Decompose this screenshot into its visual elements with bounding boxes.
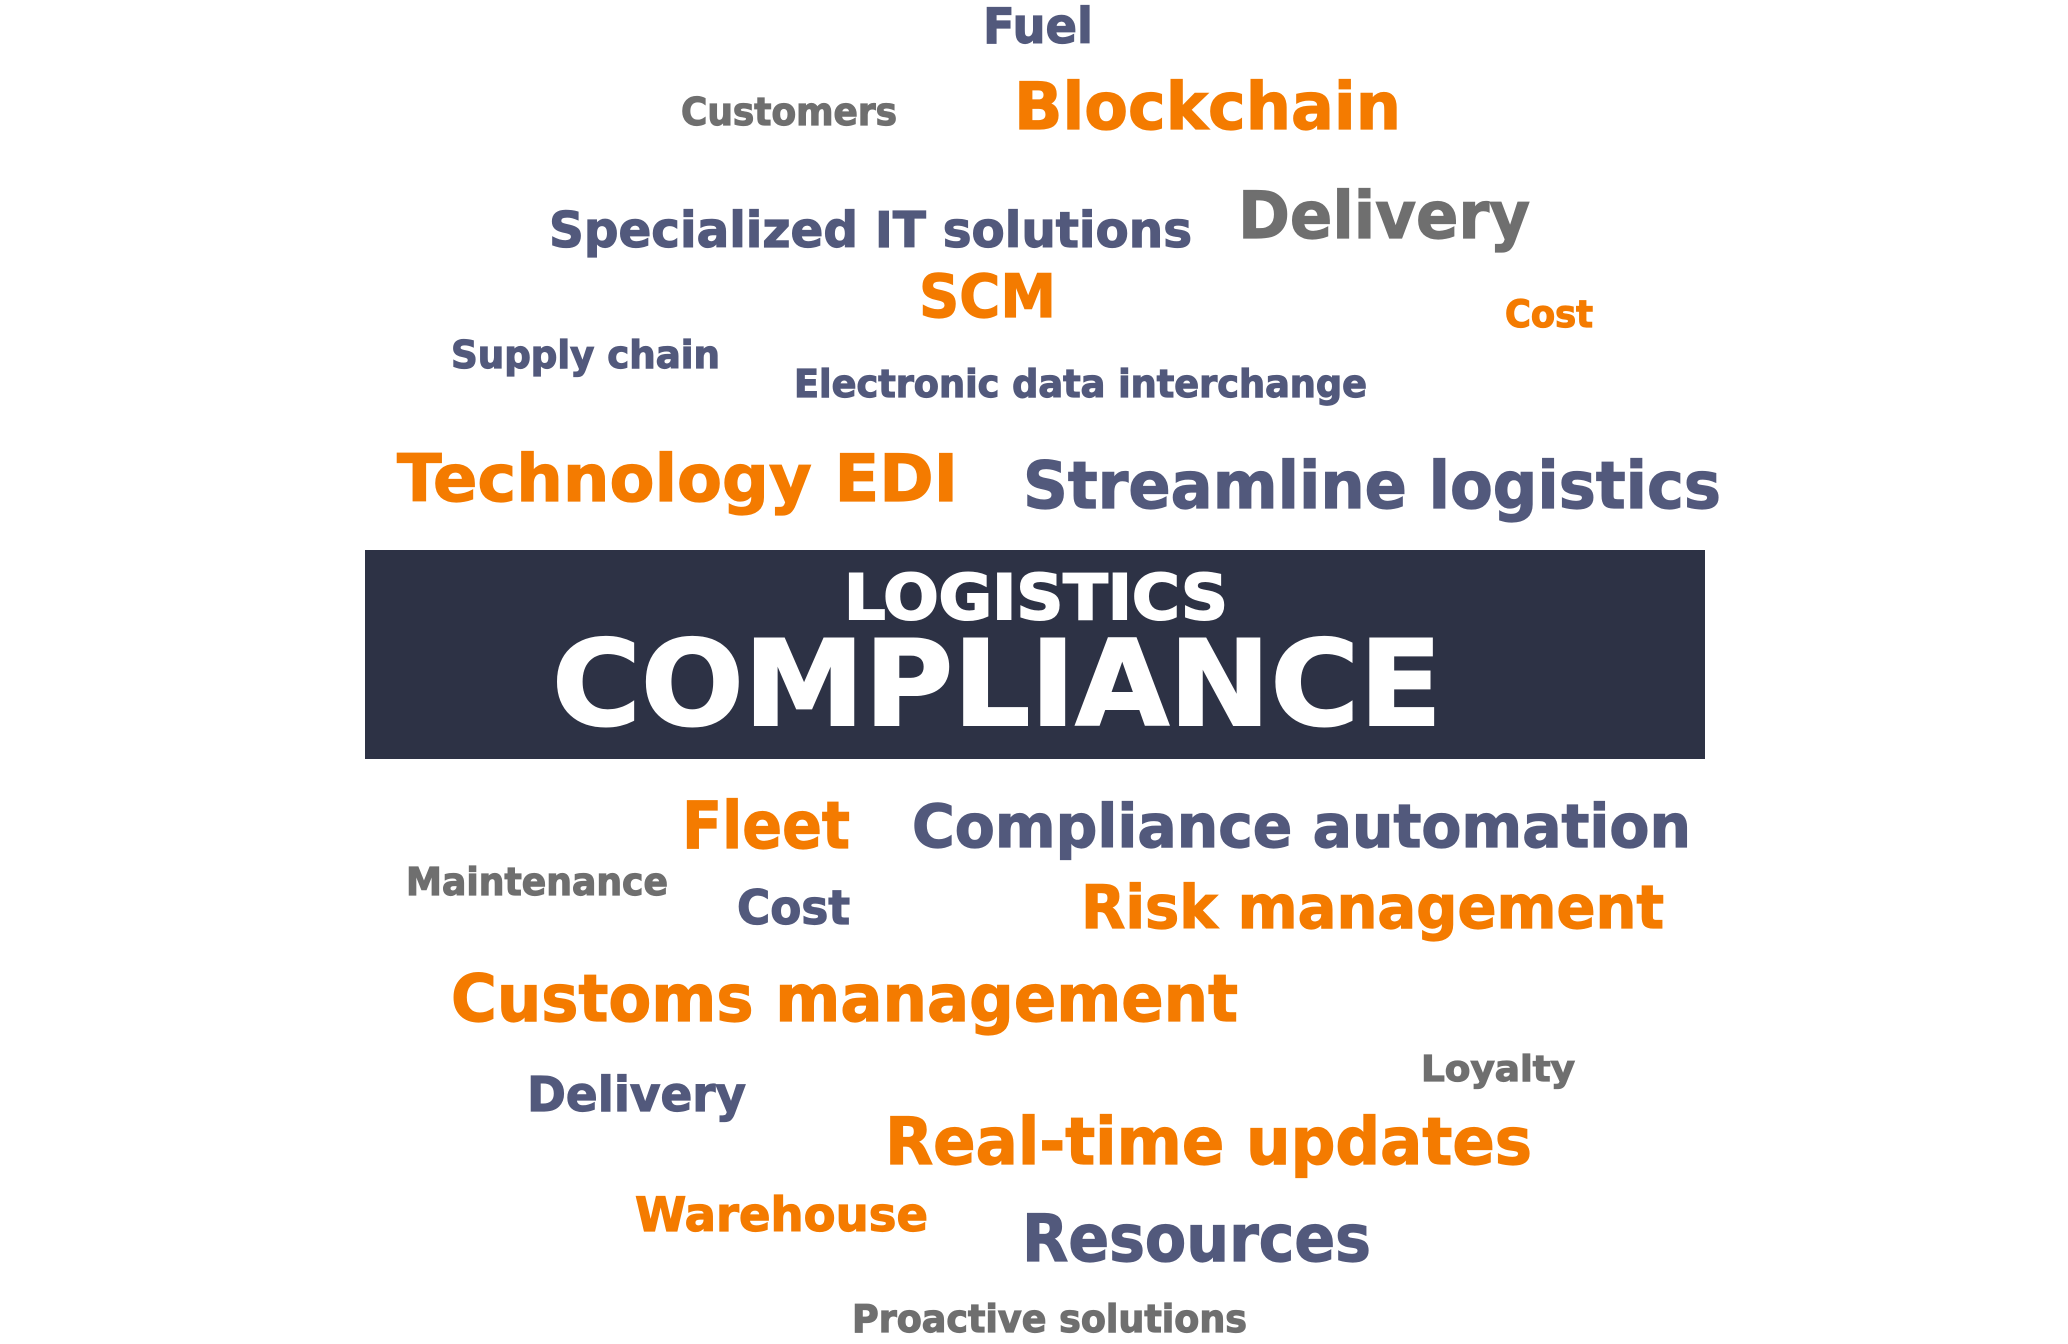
word: Cost (orange): Cost [1505, 293, 1593, 336]
word: Loyalty: Loyalty [1421, 1049, 1575, 1090]
word: Resources: Resources [1022, 1202, 1371, 1277]
title: COMPLIANCE: COMPLIANCE [552, 616, 1442, 754]
word: Compliance automation: Compliance automation [912, 792, 1691, 862]
word: Technology EDI: Technology EDI [397, 442, 958, 517]
word: Specialized IT solutions: Specialized IT solutions [549, 202, 1192, 259]
word: Streamline logistics: Streamline logistics [1023, 449, 1721, 524]
word: Customs management: Customs management [451, 962, 1238, 1037]
word: Fleet: Fleet [682, 789, 850, 864]
title banner [365, 550, 1705, 759]
word: Real-time updates: Real-time updates [885, 1105, 1532, 1180]
title: LOGISTICS: LOGISTICS [844, 561, 1228, 634]
word: Proactive solutions: Proactive solutions [852, 1297, 1247, 1341]
word: Delivery (blue): Delivery [527, 1067, 746, 1123]
word: Cost (blue): Cost [737, 881, 850, 936]
word: Delivery (grey): Delivery [1238, 179, 1530, 254]
word: Supply chain: Supply chain [451, 333, 720, 377]
word: Warehouse: Warehouse [635, 1188, 928, 1243]
word: Maintenance: Maintenance [406, 860, 668, 904]
word: Blockchain: Blockchain [1014, 70, 1401, 145]
word: Customers: Customers [681, 90, 897, 134]
word: Risk management: Risk management [1081, 873, 1664, 943]
word: SCM: SCM [919, 262, 1056, 332]
word: Electronic data interchange: Electronic data interchange [794, 362, 1367, 406]
